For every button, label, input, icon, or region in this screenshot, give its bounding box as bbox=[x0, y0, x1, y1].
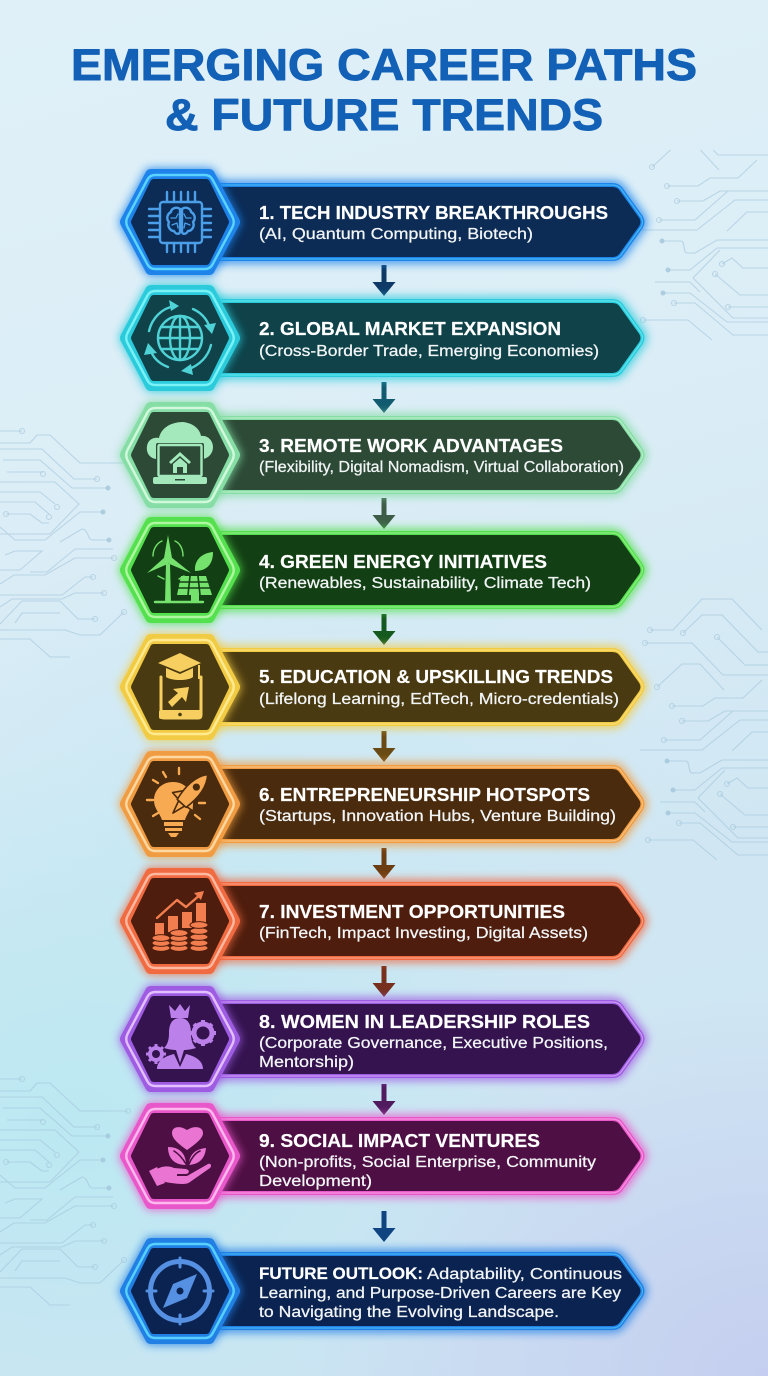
heading: 7. INVESTMENT OPPORTUNITIES bbox=[259, 901, 565, 922]
hexagon badge bbox=[126, 175, 234, 269]
heading: 6. ENTREPRENEURSHIP HOTSPOTS bbox=[259, 784, 590, 805]
circuit pattern: left bottom bbox=[0, 1076, 130, 1305]
description bbox=[259, 1035, 608, 1071]
panel: 6 entrepreneurship hotspots bbox=[126, 757, 642, 851]
banner bar bbox=[215, 1002, 642, 1076]
arrow: step 7 to 8 bbox=[372, 966, 396, 997]
hexagon badge bbox=[126, 523, 234, 617]
outlook text: to Navigating the Evolving Landscape. bbox=[259, 1304, 559, 1321]
panel: 1 tech industry breakthroughs bbox=[126, 175, 642, 269]
description: Mentorship) bbox=[259, 1054, 354, 1071]
icon: cloud and laptop with house bbox=[147, 422, 213, 484]
description: (Non-profits, Social Enterprise, Community bbox=[259, 1154, 596, 1171]
icon: compass bbox=[147, 1258, 213, 1324]
banner bar bbox=[215, 767, 642, 841]
title: & FUTURE TRENDS bbox=[165, 91, 603, 140]
icon: AI brain chip bbox=[149, 192, 211, 252]
banner bar bbox=[215, 650, 642, 724]
arrow: step 3 to 4 bbox=[372, 498, 396, 529]
description: (Lifelong Learning, EdTech, Micro-credentials) bbox=[259, 691, 619, 708]
circuit pattern: right middle bbox=[640, 599, 768, 860]
banner bar bbox=[215, 1254, 642, 1328]
outlook text bbox=[259, 1265, 622, 1321]
outlook text: Adaptability, Continuous bbox=[427, 1266, 622, 1283]
hexagon badge bbox=[126, 874, 234, 968]
panel: 2 global market expansion bbox=[126, 291, 642, 385]
heading: 5. EDUCATION & UPSKILLING TRENDS bbox=[259, 666, 613, 687]
description: Development) bbox=[259, 1173, 372, 1190]
heading: 2. GLOBAL MARKET EXPANSION bbox=[259, 318, 561, 339]
heading: 9. SOCIAL IMPACT VENTURES bbox=[259, 1130, 540, 1151]
description: (Renewables, Sustainability, Climate Tech) bbox=[259, 575, 591, 592]
arrow: step 4 to 5 bbox=[372, 614, 396, 645]
title bbox=[71, 41, 697, 140]
icon: lightbulb and rocket bbox=[147, 765, 218, 837]
hexagon badge bbox=[126, 757, 234, 851]
heading: 3. REMOTE WORK ADVANTAGES bbox=[259, 435, 563, 456]
hexagon badge bbox=[126, 992, 234, 1086]
heading: 1. TECH INDUSTRY BREAKTHROUGHS bbox=[259, 202, 608, 223]
outlook text: FUTURE OUTLOOK: bbox=[259, 1265, 423, 1283]
description: (Flexibility, Digital Nomadism, Virtual Collaboration) bbox=[259, 459, 624, 476]
icon: graduation cap and tablet bbox=[158, 653, 201, 719]
circuit pattern: top right bbox=[640, 150, 768, 340]
panel: 8 women in leadership roles bbox=[126, 992, 642, 1086]
hexagon badge bbox=[126, 1109, 234, 1203]
panel: 4 green energy initiatives bbox=[126, 523, 642, 617]
arrow: step 2 to 3 bbox=[372, 382, 396, 413]
panel: future outlook bbox=[126, 1244, 642, 1338]
banner bar bbox=[215, 418, 642, 492]
hexagon badge bbox=[126, 640, 234, 734]
heading: 4. GREEN ENERGY INITIATIVES bbox=[259, 551, 547, 572]
arrow: step 1 to 2 bbox=[372, 265, 396, 296]
icon: heart, sprout and open hand bbox=[149, 1127, 211, 1186]
icon: bar chart and coin stacks bbox=[152, 891, 208, 951]
banner bar bbox=[215, 301, 642, 375]
description: (FinTech, Impact Investing, Digital Assets) bbox=[259, 925, 588, 942]
description bbox=[259, 1154, 596, 1190]
icon: wind turbine, leaf and solar panel bbox=[147, 535, 213, 602]
panel: 5 education and upskilling trends bbox=[126, 640, 642, 734]
description: (AI, Quantum Computing, Biotech) bbox=[259, 226, 533, 243]
circuit pattern: left middle bbox=[0, 428, 130, 657]
banner bar bbox=[215, 185, 642, 259]
hexagon badge bbox=[126, 1244, 234, 1338]
arrow: step 6 to 7 bbox=[372, 848, 396, 879]
icon: globe with arrows bbox=[144, 300, 216, 375]
icon: woman with crown and gears bbox=[146, 1004, 216, 1069]
description: (Startups, Innovation Hubs, Venture Building) bbox=[259, 808, 616, 825]
description: (Corporate Governance, Executive Positions, bbox=[259, 1035, 608, 1052]
title: EMERGING CAREER PATHS bbox=[71, 41, 697, 90]
arrow: step 9 to outlook bbox=[372, 1211, 396, 1242]
arrow: step 5 to 6 bbox=[372, 731, 396, 762]
banner bar bbox=[215, 533, 642, 607]
banner bar bbox=[215, 884, 642, 958]
panel: 7 investment opportunities bbox=[126, 874, 642, 968]
panel: 3 remote work advantages bbox=[126, 408, 642, 502]
hexagon badge bbox=[126, 408, 234, 502]
description: (Cross-Border Trade, Emerging Economies) bbox=[259, 343, 599, 360]
heading: 8. WOMEN IN LEADERSHIP ROLES bbox=[259, 1011, 590, 1032]
arrow: step 8 to 9 bbox=[372, 1084, 396, 1115]
hexagon badge bbox=[126, 291, 234, 385]
outlook text: Learning, and Purpose-Driven Careers are Key bbox=[259, 1285, 621, 1302]
banner bar bbox=[215, 1119, 642, 1193]
panel: 9 social impact ventures bbox=[126, 1109, 642, 1203]
